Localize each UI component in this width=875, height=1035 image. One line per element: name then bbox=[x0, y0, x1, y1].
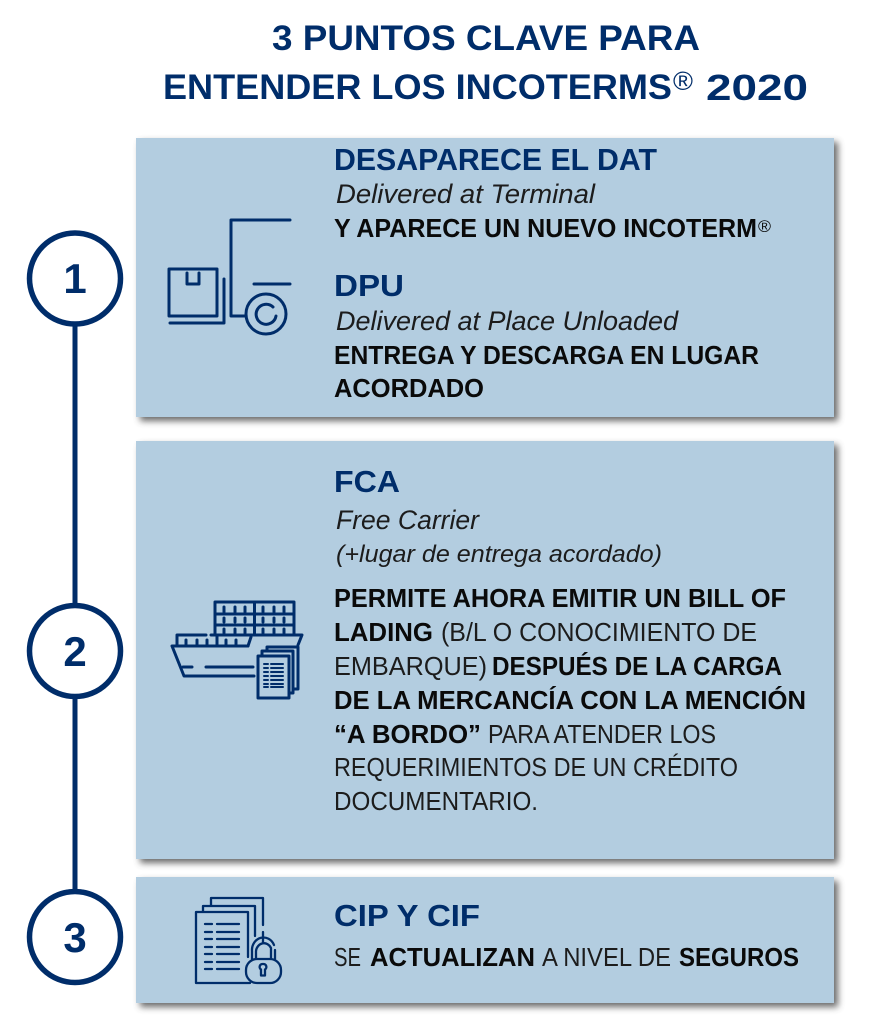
text: bill of lading paragraph: DOCUMENTARIO. bbox=[334, 788, 538, 816]
step 2 badge: 2 bbox=[63, 628, 87, 675]
step 1 badge bbox=[30, 233, 120, 324]
text: entrega y descarga: ENTREGA Y DESCARGA EN LUGAR bbox=[334, 342, 759, 370]
heading: FCA: FCA bbox=[334, 464, 400, 499]
text: bill of lading paragraph: (B/L O CONOCIMIENTO DE bbox=[441, 619, 757, 647]
text: entrega y descarga: ACORDADO bbox=[334, 375, 484, 403]
text: se actualizan a nivel de seguros: SE bbox=[334, 944, 361, 972]
text: bill of lading paragraph: “A BORDO” bbox=[334, 721, 481, 749]
text: bill of lading paragraph: LADING bbox=[334, 619, 433, 647]
text: bill of lading paragraph: PERMITE AHORA EMITIR UN BILL OF bbox=[334, 585, 786, 613]
text: free carrier: Free Carrier bbox=[336, 505, 480, 535]
title bbox=[163, 19, 808, 108]
text: bill of lading paragraph: DESPUÉS DE LA CARGA bbox=[492, 652, 782, 681]
text: bill of lading paragraph: REQUERIMIENTOS DE UN CRÉDITO bbox=[334, 753, 738, 782]
heading: CIP y CIF: CIP Y CIF bbox=[334, 898, 480, 933]
panel 2: FCA bbox=[136, 441, 838, 863]
step 3 badge bbox=[30, 892, 120, 982]
heading: desaparece el DAT: DESAPARECE EL DAT bbox=[334, 142, 657, 177]
text: bill of lading paragraph bbox=[334, 585, 806, 816]
text: bill of lading paragraph: DE LA MERCANCÍA CON LA MENCIÓN bbox=[334, 685, 806, 715]
text: se actualizan a nivel de seguros: ACTUALIZAN bbox=[370, 944, 535, 972]
text: delivered at place unloaded: Delivered at Place Unloaded bbox=[336, 306, 679, 336]
text: se actualizan a nivel de seguros: SEGUROS bbox=[679, 944, 799, 972]
icon: forklift with box bbox=[169, 220, 290, 334]
text: nuevo incoterm: Y APARECE UN NUEVO INCOTERM bbox=[334, 215, 757, 243]
timeline connector bbox=[72, 320, 78, 895]
icon: container ship with documents bbox=[172, 602, 302, 698]
step 1 badge: 1 bbox=[63, 255, 87, 302]
step 2 badge bbox=[30, 606, 120, 696]
icon: documents with padlock bbox=[196, 898, 281, 983]
title: 2020 bbox=[706, 67, 808, 108]
heading: DPU: DPU bbox=[334, 268, 404, 303]
text: entrega y descarga bbox=[334, 342, 759, 403]
text: bill of lading paragraph: EMBARQUE) bbox=[334, 653, 487, 681]
text: se actualizan a nivel de seguros bbox=[334, 944, 799, 972]
text: delivered at terminal: Delivered at Terminal bbox=[336, 179, 596, 209]
step 3 badge: 3 bbox=[63, 914, 87, 961]
panel 1: DAT and DPU bbox=[136, 138, 838, 421]
title: 3 PUNTOS CLAVE PARA bbox=[272, 19, 700, 58]
title: ® bbox=[673, 66, 693, 96]
title: ENTENDER LOS INCOTERMS bbox=[163, 68, 672, 107]
text: bill of lading paragraph: PARA ATENDER LOS bbox=[488, 721, 716, 749]
text: lugar de entrega acordado: (+lugar de entrega acordado) bbox=[336, 541, 662, 568]
text: nuevo incoterm: ® bbox=[758, 217, 771, 236]
text: se actualizan a nivel de seguros: A NIVEL DE bbox=[542, 944, 671, 972]
panel 3: CIP and CIF bbox=[136, 877, 838, 1007]
